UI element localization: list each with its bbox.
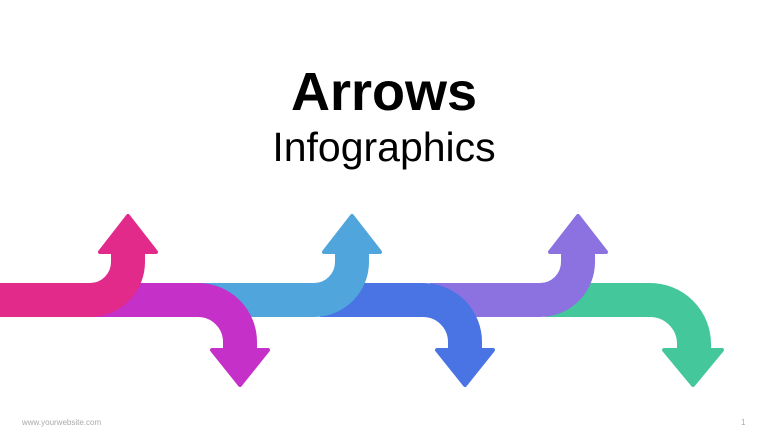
arrow: pink up [0, 216, 156, 300]
arrow: royal blue down [320, 300, 493, 385]
page number: 1 [741, 418, 745, 427]
title: Arrows [291, 62, 477, 122]
arrow: purple down [80, 300, 268, 385]
footer website: www.yourwebsite.com [22, 418, 101, 427]
arrow: green down [545, 300, 722, 385]
arrow: lavender up [430, 216, 606, 300]
subtitle: Infographics [272, 124, 496, 170]
arrow: blue up [200, 216, 380, 300]
